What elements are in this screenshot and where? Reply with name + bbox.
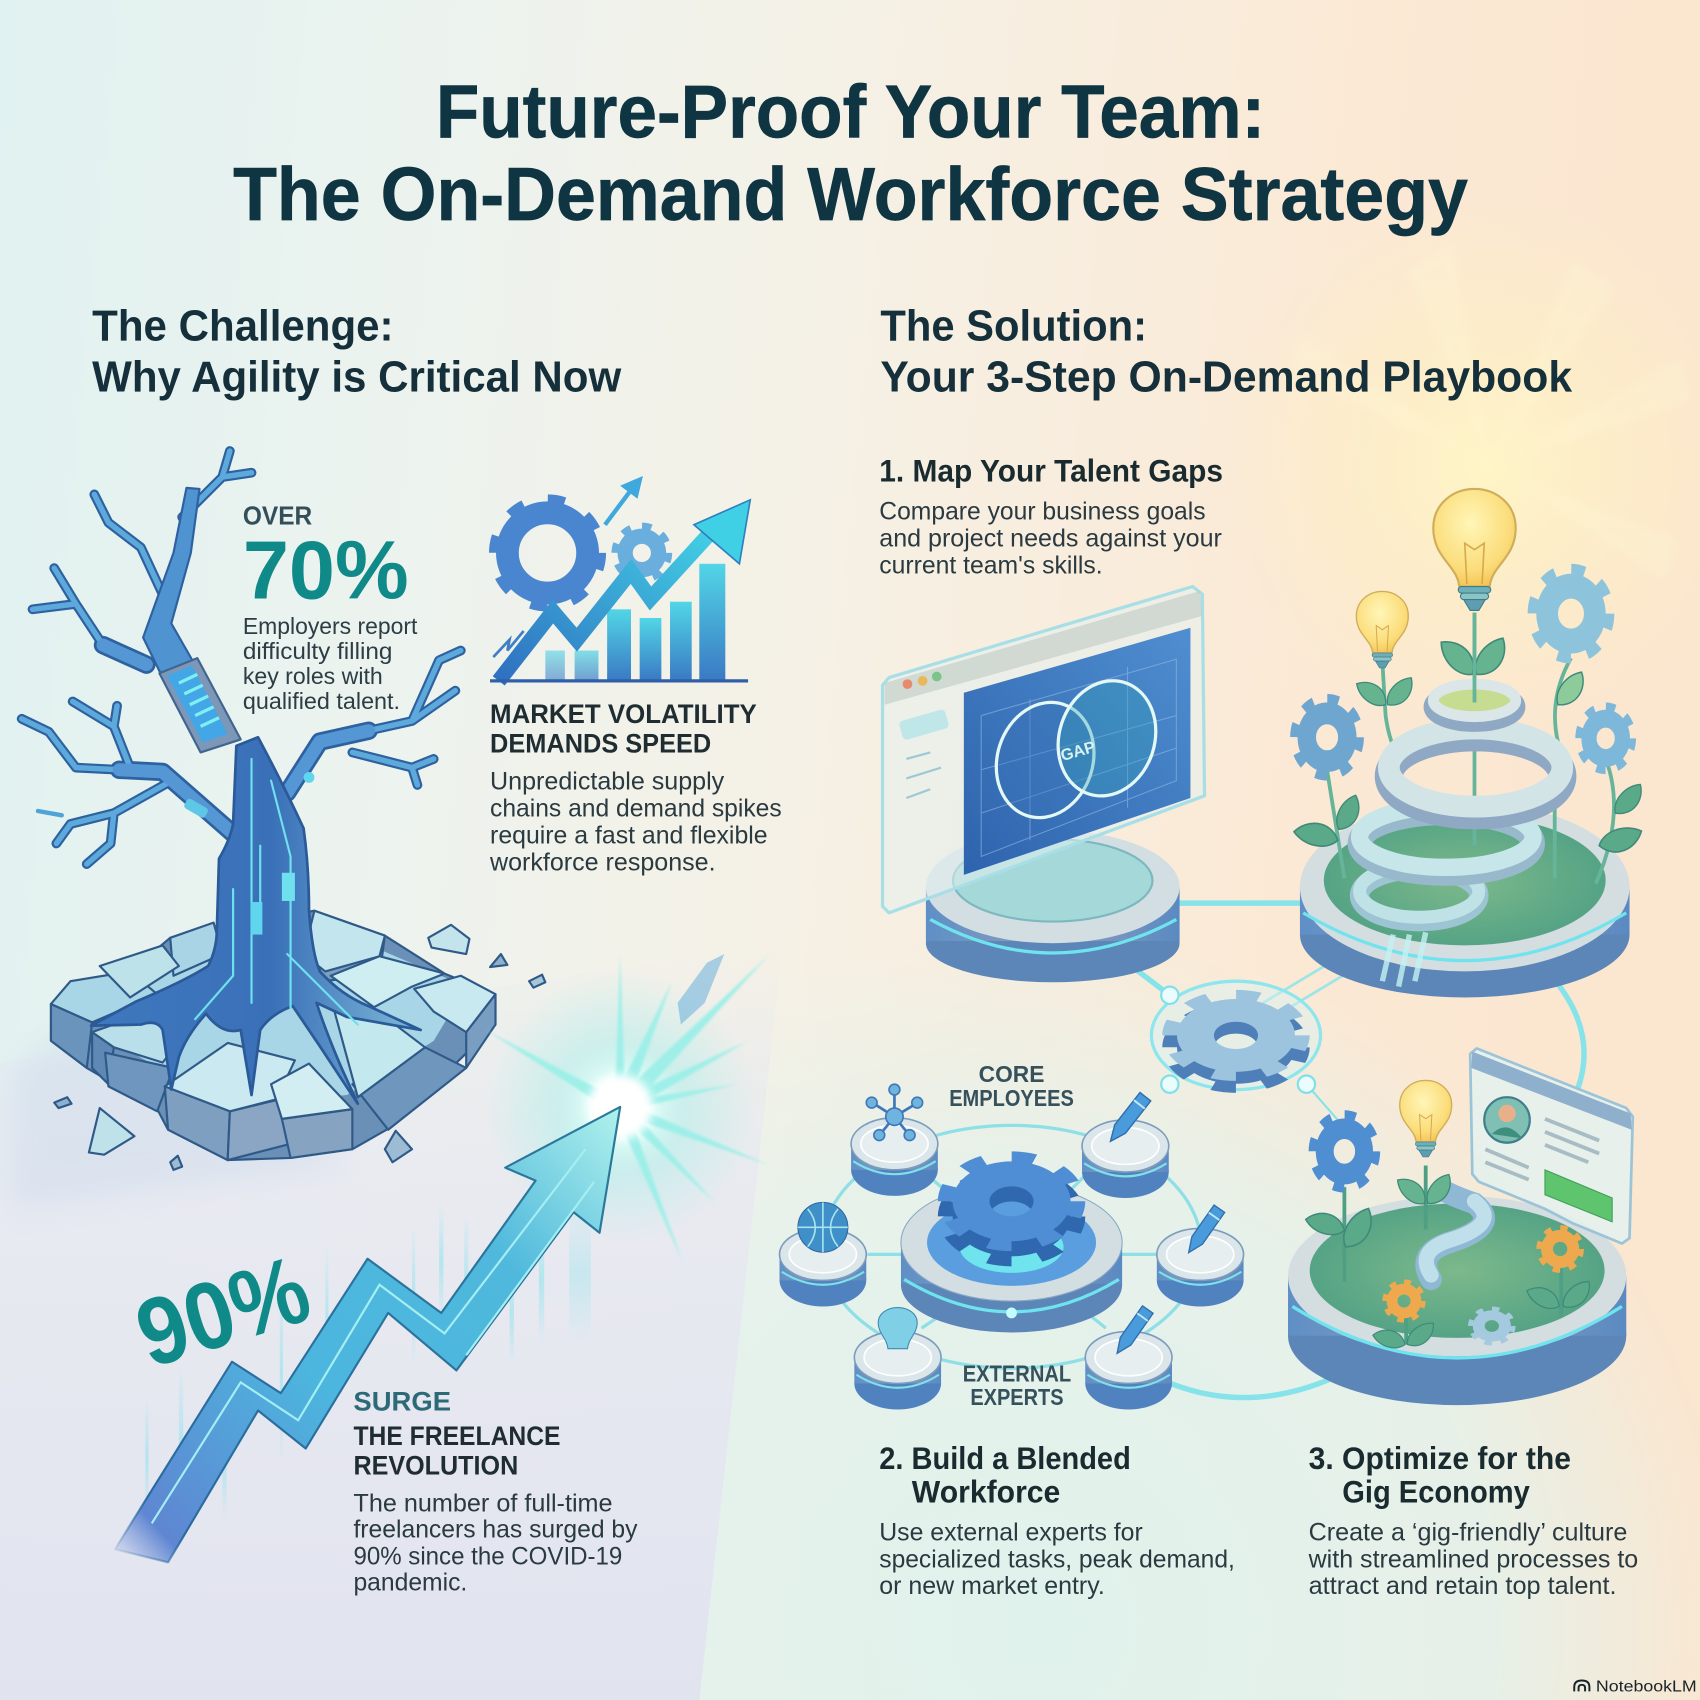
illustration: step 1 platform [926, 830, 1180, 982]
illustration: surge arrow [115, 1107, 620, 1562]
text: step 2: or new market entry. [879, 1572, 1105, 1600]
label: core employees: CORE [979, 1061, 1044, 1087]
heading: the solution [880, 302, 1573, 401]
text: the freelance revolution: The number of full-time [353, 1489, 613, 1517]
text: the freelance revolution: 90% since the COVID-19 [353, 1542, 622, 1570]
text: market volatility: require a fast and flexible [490, 821, 768, 849]
icon: tablet on tree [159, 658, 241, 752]
satellite nodes [780, 1118, 1244, 1409]
heading: the solution: The Solution: [880, 302, 1147, 350]
tree trunk and roots [91, 737, 421, 1104]
stat: over 70%: difficulty filling [243, 638, 392, 664]
illustration: talent profile card [1470, 1048, 1633, 1244]
illustration: step 1 growth platform [1300, 802, 1630, 997]
label: external experts: EXPERTS [970, 1384, 1064, 1410]
text: step 3: with streamlined processes to [1308, 1546, 1638, 1574]
tree branches fill [22, 451, 461, 864]
text: step 3: attract and retain top talent. [1309, 1572, 1617, 1600]
notebooklm watermark: NotebookLM [1596, 1678, 1697, 1695]
illustration: cracked ground [51, 911, 545, 1170]
title: The On-Demand Workforce Strategy [233, 152, 1468, 236]
illustration: tree [22, 451, 461, 1104]
node icons [798, 1084, 1225, 1357]
text: step 3: 3. Optimize for the [1309, 1441, 1571, 1476]
text: step 1: current team's skills. [879, 552, 1103, 580]
illustration: plants, gears and bulbs [1292, 489, 1649, 884]
stat: over 70%: key roles with [243, 663, 383, 689]
label: external experts [963, 1360, 1071, 1410]
icon: gears and rising chart [490, 476, 750, 681]
stat: 90%: 90% [125, 1236, 322, 1388]
illustration: gap analysis screen: GAP [1059, 738, 1098, 765]
illustration: light burst [485, 954, 770, 1263]
text: step 3: Create a ‘gig-friendly’ culture [1309, 1519, 1627, 1547]
illustration: spiral ramp [1360, 613, 1562, 922]
text: market volatility: Unpredictable supply [490, 767, 725, 795]
text: step 2: Use external experts for [879, 1519, 1143, 1547]
stat: over 70%: qualified talent. [243, 688, 400, 714]
heading: the challenge: The Challenge: [92, 302, 394, 350]
text: market volatility: workforce response. [489, 849, 716, 877]
stat: over 70% [243, 501, 418, 714]
title: Future-Proof Your Team: [436, 70, 1265, 154]
text: market volatility: DEMANDS SPEED [490, 727, 711, 758]
stat: over 70%: 70% [243, 524, 409, 616]
text: step 2: 2. Build a Blended [879, 1441, 1131, 1476]
central platform with gear [901, 1159, 1122, 1332]
text: step 1 [879, 453, 1223, 580]
text: the freelance revolution: freelancers has surged by [353, 1515, 638, 1543]
stat: over 70%: OVER [243, 501, 312, 531]
text: the freelance revolution: THE FREELANCE [353, 1420, 561, 1451]
title [233, 70, 1468, 236]
diagram: blended workforce [780, 1084, 1244, 1409]
illustration: gap analysis screen [883, 587, 1205, 913]
heading: the challenge: Why Agility is Critical Now [92, 353, 621, 401]
tree branches outline [22, 451, 461, 864]
heading: the challenge [92, 302, 621, 401]
connector lines [1116, 903, 1584, 1398]
label: core employees: EMPLOYEES [949, 1085, 1074, 1111]
text: the freelance revolution: pandemic. [353, 1568, 467, 1596]
heading: the solution: Your 3-Step On-Demand Playbook [880, 353, 1573, 401]
illustration: gig economy platform [1288, 1080, 1626, 1405]
icon: central gear hub [1151, 981, 1321, 1093]
text: the freelance revolution: REVOLUTION [353, 1449, 518, 1480]
text: step 1: Compare your business goals [879, 497, 1206, 525]
text: step 3 [1308, 1441, 1638, 1600]
text: market volatility: MARKET VOLATILITY [490, 698, 757, 729]
text: step 2: Workforce [912, 1475, 1060, 1510]
label: external experts: EXTERNAL [963, 1360, 1071, 1386]
text: step 1: 1. Map Your Talent Gaps [879, 453, 1223, 488]
text: step 3: Gig Economy [1342, 1475, 1530, 1510]
text: step 1: and project needs against your [879, 524, 1222, 552]
text: step 2 [879, 1441, 1235, 1600]
text: market volatility: chains and demand spikes [490, 794, 782, 822]
label: core employees [949, 1061, 1074, 1111]
stat: over 70%: Employers report [243, 613, 418, 639]
text: step 2: specialized tasks, peak demand, [879, 1546, 1235, 1574]
text: the freelance revolution: SURGE [353, 1386, 451, 1417]
text: market volatility [489, 698, 782, 877]
text: the freelance revolution [353, 1386, 638, 1596]
